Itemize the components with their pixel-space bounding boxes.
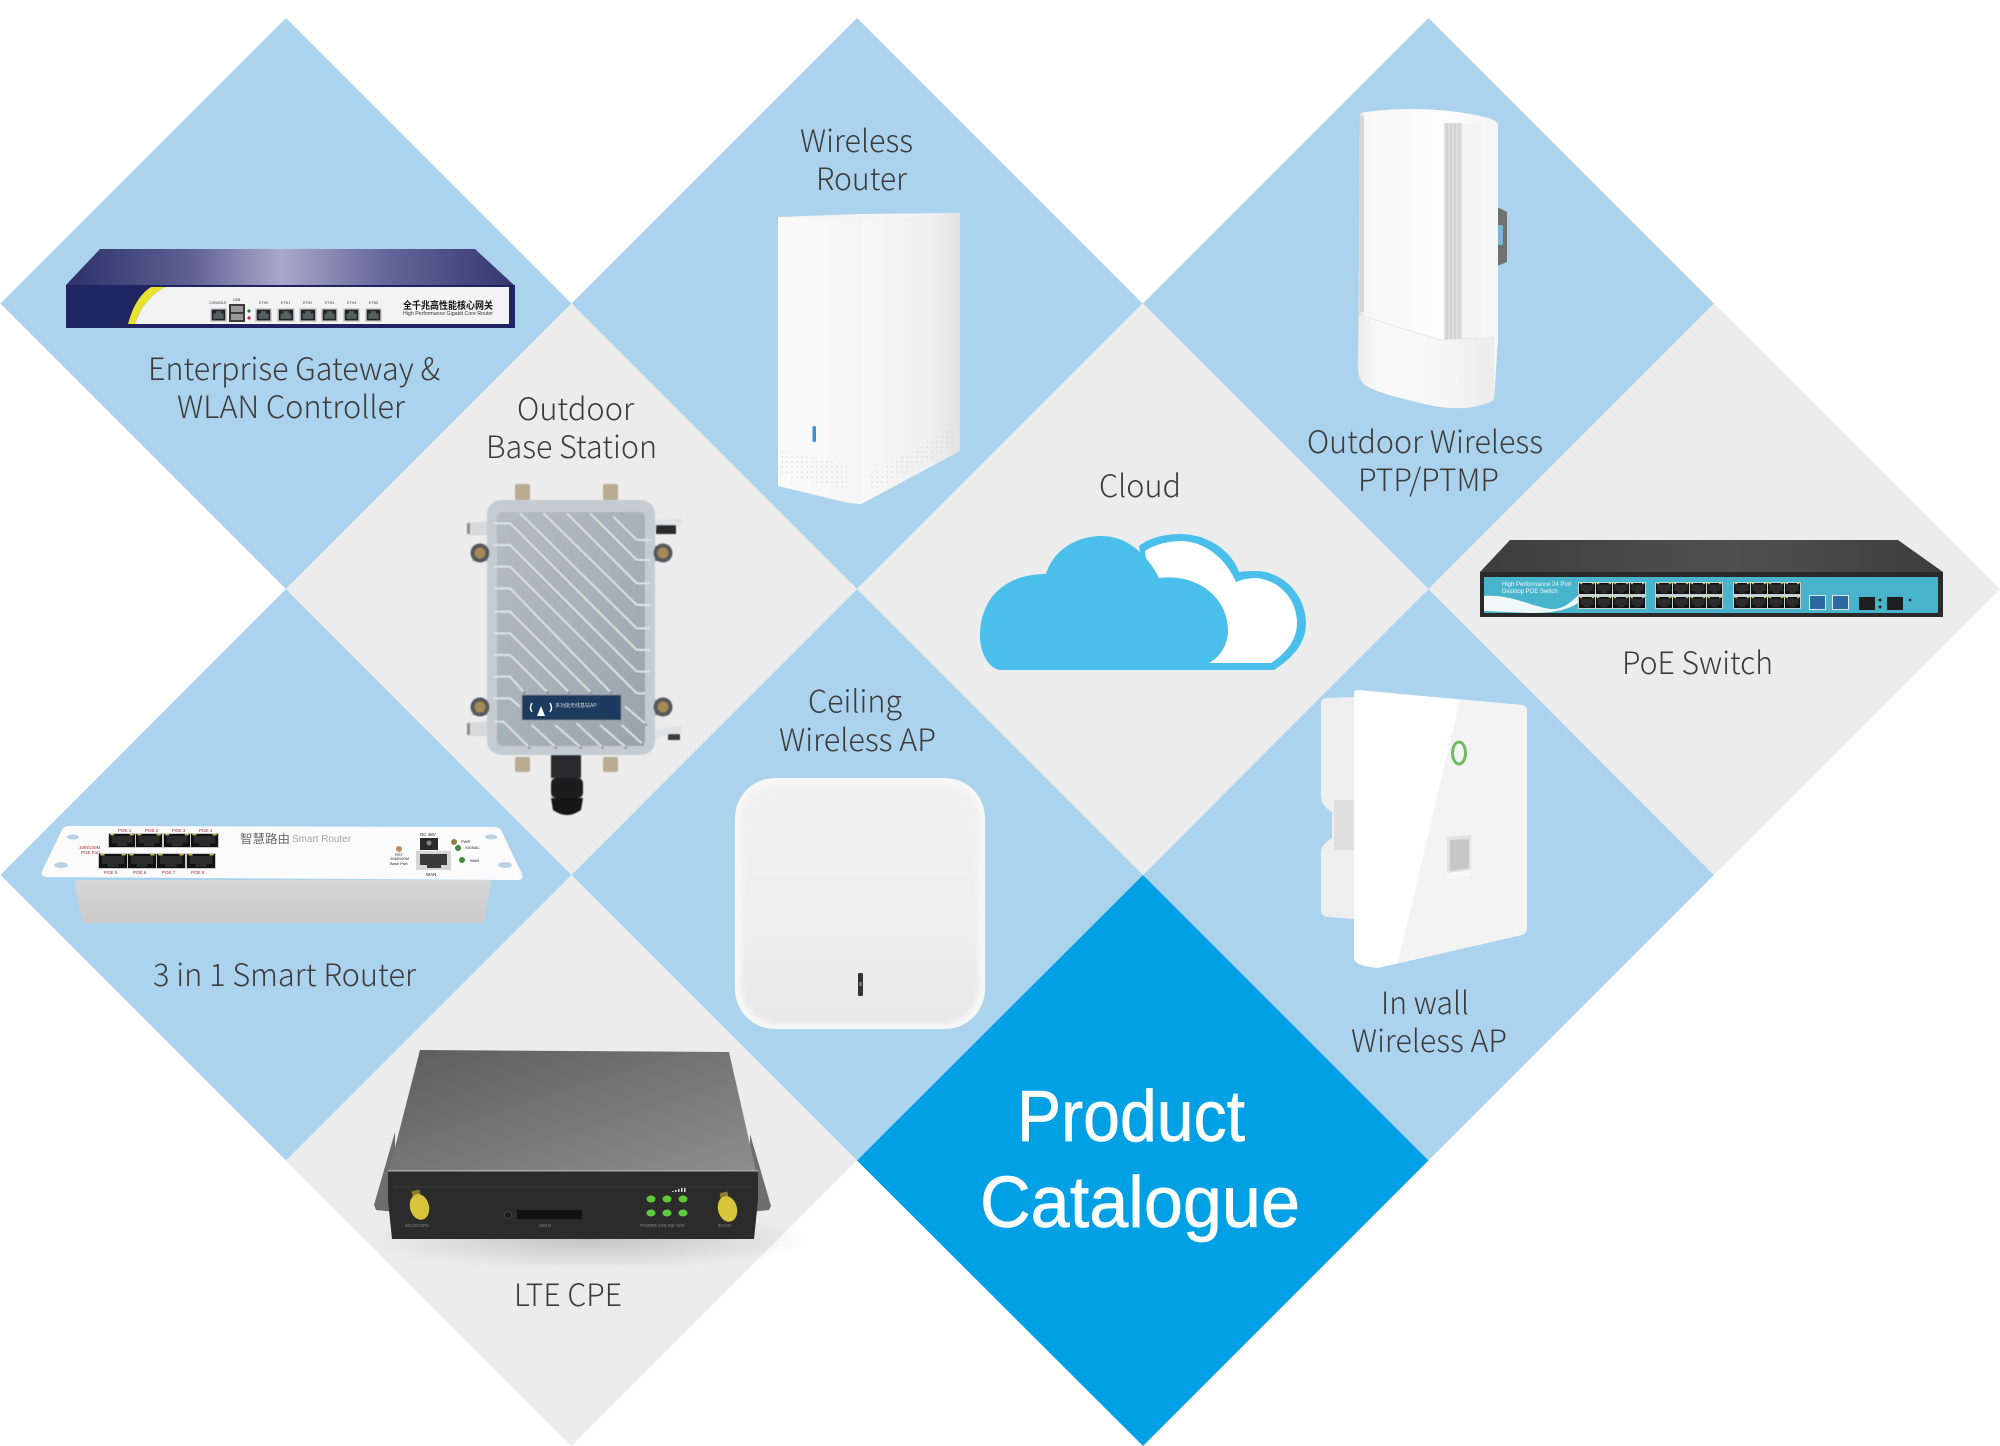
device: enterprise gateway: ETH5 (369, 301, 378, 305)
device: PoE switch (1480, 540, 1943, 617)
panel: 3 in 1 smart router diamond (0, 589, 572, 1160)
device: wireless router (778, 213, 960, 504)
device: LTE CPE (365, 1050, 815, 1270)
device: 3 in 1 smart router: POE 5 (104, 870, 118, 875)
device: outdoor base station (467, 484, 682, 815)
device: PoE switch: Desktop POE Switch (1502, 589, 1558, 595)
device: 3 in 1 smart router: WAN (426, 872, 436, 877)
device: 3 in 1 smart router: POE 7 (162, 870, 176, 875)
title: product: Product (1017, 1077, 1245, 1157)
device: 3 in 1 smart router: PWR (461, 839, 470, 844)
panel: cloud diamond (857, 304, 1428, 875)
label: PTP/PTMP: PTP/PTMP (1358, 455, 1499, 500)
device: PoE switch: High Performance 24 Port (1502, 582, 1572, 588)
device: 3 in 1 smart router: WAN (470, 858, 479, 863)
device: 3 in 1 smart router: Smart Router (292, 834, 352, 845)
device: 3 in 1 smart router: POE 6 (133, 870, 147, 875)
label: router: Router (816, 154, 908, 199)
label: outdoor: Outdoor (517, 384, 635, 429)
device: enterprise gateway: USB (233, 298, 241, 302)
device: 3 in 1 smart router (42, 826, 522, 923)
label: LTE CPE: LTE CPE (514, 1270, 622, 1315)
panel: in wall wireless AP diamond (1143, 589, 1714, 1160)
device: 3 in 1 smart router: 10M/100M (79, 845, 101, 850)
device: enterprise gateway: CONSOLE (209, 301, 227, 305)
label: cloud: Cloud (1099, 461, 1181, 506)
device: 3 in 1 smart router: POE 3 (172, 828, 186, 833)
device: ceiling wireless AP (735, 778, 985, 1029)
device: 3 in 1 smart router: SIGNAL (465, 845, 480, 850)
device: enterprise gateway: ETH4 (347, 301, 356, 305)
label: base station: Base Station (486, 422, 657, 467)
device: 3 in 1 smart router: 10M/100M (390, 856, 409, 861)
label: enterprise gateway: Enterprise Gateway & (148, 344, 440, 389)
label: wireless: Wireless (800, 116, 913, 161)
device: enterprise gateway: ETH0 (259, 301, 268, 305)
label: outdoor wireless: Outdoor Wireless (1307, 417, 1543, 462)
device: enterprise gateway (66, 249, 515, 328)
device: outdoor base station: 多功能无线基站AP (555, 702, 597, 709)
label: PoE switch: PoE Switch (1622, 638, 1773, 683)
label: wireless AP, ceiling: Wireless AP (779, 715, 936, 760)
device: LTE CPE: 3G/4G/GPS (405, 1223, 429, 1228)
device: LTE CPE: 3G/4G (718, 1223, 732, 1228)
device: 3 in 1 smart router: POE Port (81, 850, 101, 855)
panel: wireless router diamond (572, 18, 1142, 589)
device: 3 in 1 smart router: POE 8 (191, 870, 205, 875)
label: ceiling: Ceiling (808, 676, 902, 722)
device: LTE CPE: POWER ONLINE WiFi (640, 1223, 685, 1228)
panel: outdoor base station diamond (286, 304, 857, 875)
device: enterprise gateway: ETH1 (281, 301, 290, 305)
device: 3 in 1 smart router: POE 4 (199, 828, 213, 833)
label: 3 in 1 smart router: 3 in 1 Smart Router (153, 950, 417, 995)
panel: product catalogue diamond (857, 875, 1428, 1446)
panel: PoE switch diamond (1428, 304, 2000, 875)
label: in wall: In wall (1381, 978, 1469, 1023)
device: 3 in 1 smart router: POE 1 (118, 828, 132, 833)
device: 3 in 1 smart router: Base Port (390, 861, 408, 866)
title: catalogue: Catalogue (980, 1163, 1300, 1243)
device: 3 in 1 smart router: DC 48V (420, 832, 436, 837)
device: LTE CPE: SIM 0 (539, 1223, 551, 1228)
panel: outdoor wireless diamond (1143, 18, 1714, 589)
device: enterprise gateway: 全千兆高性能核心网关 (403, 299, 493, 312)
device: enterprise gateway: High Performance Gigabit Core Router (403, 311, 493, 317)
device: enterprise gateway: ETH2 (303, 301, 312, 305)
label: wireless AP, in wall: Wireless AP (1351, 1016, 1507, 1061)
device: in wall wireless AP (1321, 690, 1527, 968)
panel: enterprise gateway diamond (0, 18, 572, 589)
device: 3 in 1 smart router: RST (395, 852, 404, 857)
device: 3 in 1 smart router: POE 2 (145, 828, 159, 833)
device: enterprise gateway: ETH3 (325, 301, 334, 305)
panel: LTE CPE diamond (286, 875, 857, 1446)
panel: ceiling wireless AP diamond (572, 589, 1143, 1160)
device: outdoor wireless bridge (1358, 109, 1507, 408)
device: 3 in 1 smart router: 智慧路由 (240, 831, 290, 846)
label: WLAN controller: WLAN Controller (177, 382, 406, 427)
icon: cloud (980, 534, 1306, 670)
